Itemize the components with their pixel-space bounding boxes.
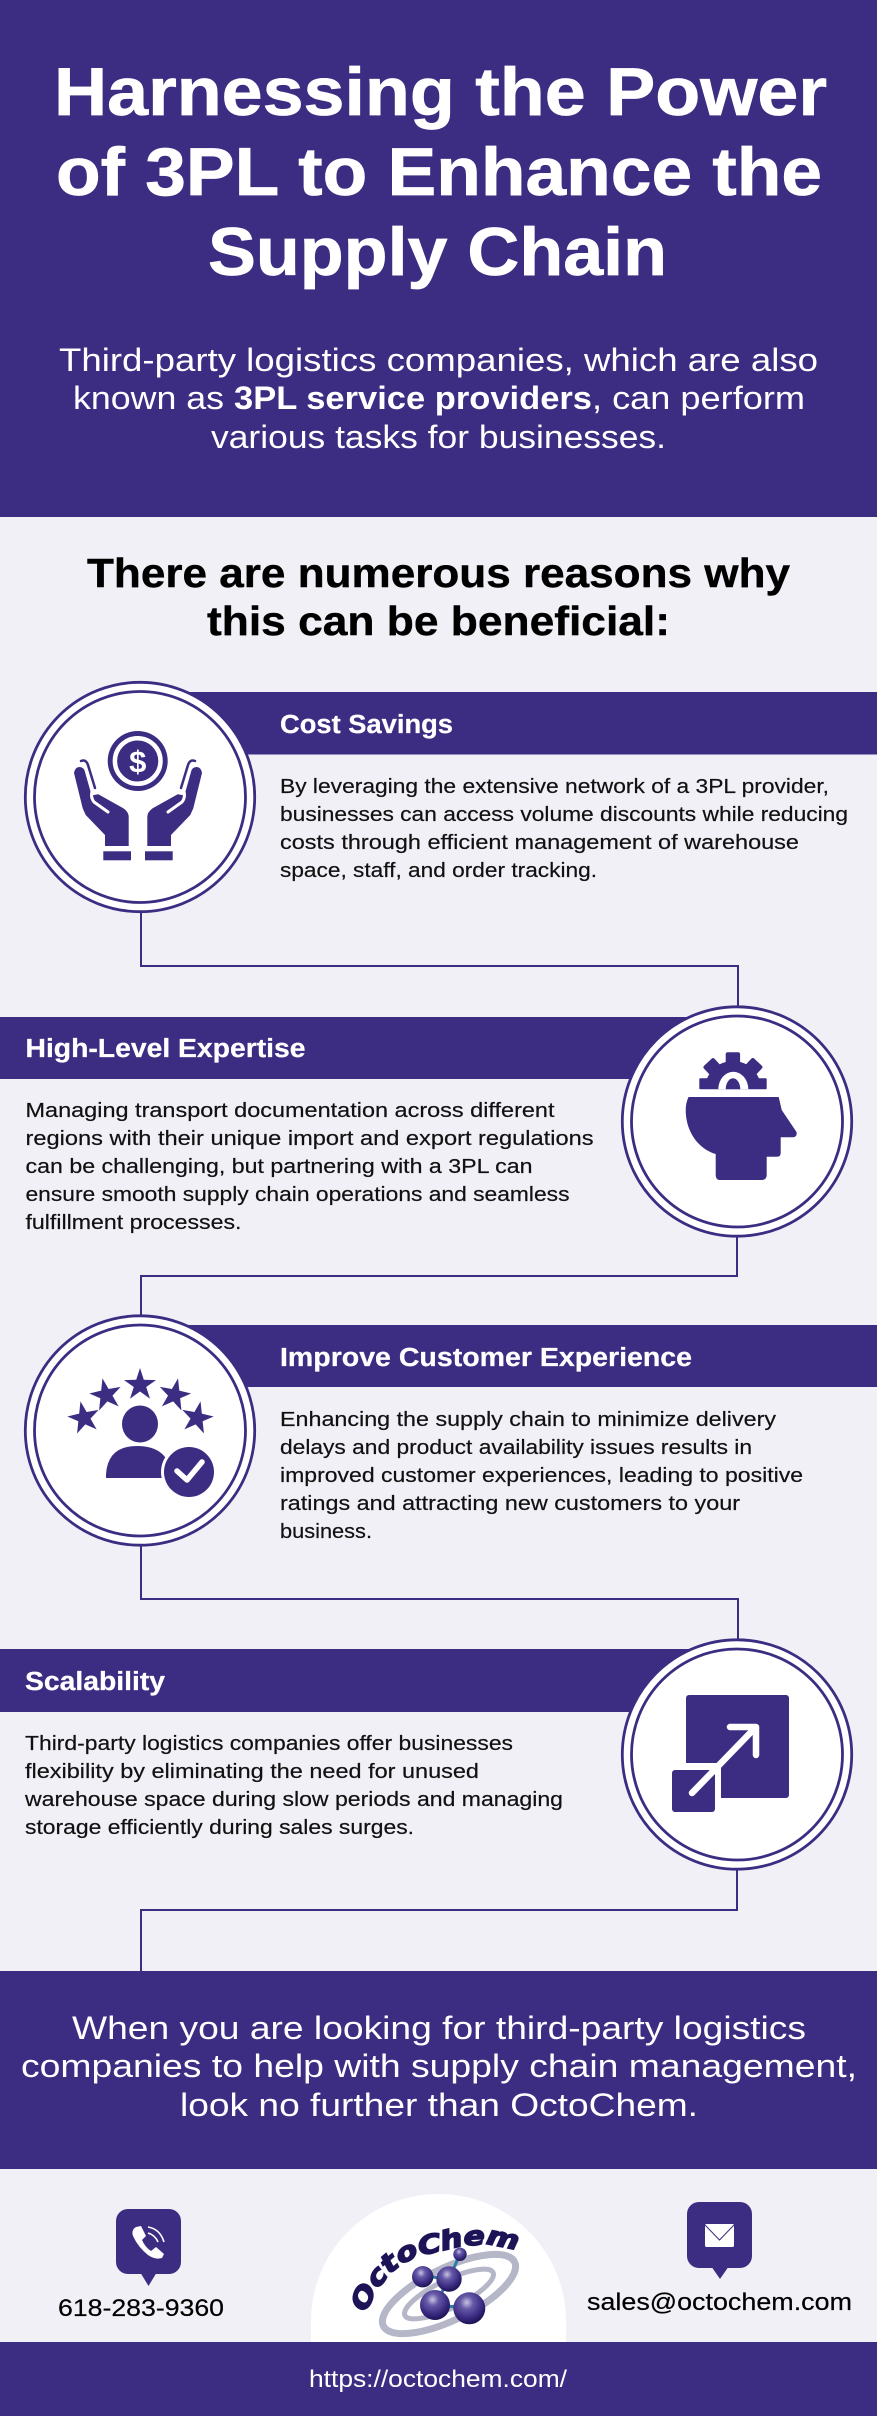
text: improve customer experience: delays and product availability issues results in xyxy=(280,1436,752,1459)
icon: hands holding coin xyxy=(25,682,255,912)
header panel xyxy=(0,0,877,517)
intro text xyxy=(59,342,818,455)
text: scalability: storage efficiently during sales surges. xyxy=(25,1816,414,1839)
section heading: There are numerous reasons why xyxy=(87,550,791,596)
intro text: , can perform xyxy=(592,380,805,416)
icon: customer with rating stars xyxy=(25,1316,255,1545)
call to action panel: When you are looking for third-party logistics xyxy=(72,2010,806,2046)
text: improve customer experience: business. xyxy=(280,1520,372,1543)
footer band with url: https://octochem.com/ xyxy=(309,2366,567,2393)
icon: phone pin xyxy=(116,2209,181,2286)
connector lines xyxy=(141,905,738,1971)
icon: head with gear xyxy=(622,1007,852,1236)
text: cost savings: By leveraging the extensive network of a 3PL provider, xyxy=(280,775,829,798)
text: high-level expertise: Managing transport documentation across different xyxy=(26,1099,555,1122)
text: scalability: Third-party logistics companies offer businesses xyxy=(25,1732,513,1755)
email contact xyxy=(587,2202,852,2316)
text: improve customer experience xyxy=(280,1408,803,1543)
call to action panel: companies to help with supply chain management, xyxy=(21,2048,857,2084)
text: improve customer experience: ratings and attracting new customers to your xyxy=(280,1492,740,1515)
text: scalability xyxy=(24,1732,563,1839)
text: high-level expertise xyxy=(26,1099,594,1234)
title xyxy=(54,54,827,290)
heading band: improve customer experience xyxy=(140,1325,877,1387)
logo spheres xyxy=(412,2248,485,2324)
icon: scale arrow xyxy=(622,1640,852,1869)
text: scalability: flexibility by eliminating the need for unused xyxy=(25,1760,479,1783)
logo swirl xyxy=(372,2239,526,2349)
panel: cost savings xyxy=(25,682,877,912)
icon: email pin xyxy=(687,2202,752,2279)
intro text: 3PL service providers xyxy=(234,380,592,416)
text: high-level expertise: ensure smooth supply chain operations and seamless xyxy=(26,1183,570,1206)
section heading xyxy=(87,550,791,644)
text: high-level expertise: fulfillment processes. xyxy=(26,1211,242,1234)
call to action panel: look no further than OctoChem. xyxy=(180,2087,698,2123)
call to action panel xyxy=(0,1971,877,2169)
heading band: high-level expertise xyxy=(0,1017,737,1079)
logo wordmark: OctoChem xyxy=(352,2228,519,2310)
icon: hands holding coin: $ xyxy=(129,744,146,779)
panel: high-level expertise xyxy=(0,1007,852,1236)
heading band: cost savings xyxy=(140,692,877,754)
heading band: high-level expertise: High-Level Expertise xyxy=(26,1035,306,1063)
heading band: scalability xyxy=(0,1649,737,1712)
intro text: Third-party logistics companies, which are also xyxy=(59,342,818,378)
title: Harnessing the Power xyxy=(54,54,827,130)
footer band with url xyxy=(0,2342,877,2416)
title: of 3PL to Enhance the xyxy=(56,134,822,210)
text: cost savings xyxy=(280,775,848,882)
phone contact xyxy=(58,2209,224,2322)
text: high-level expertise: regions with their unique import and export regulations xyxy=(26,1127,594,1150)
panel: scalability xyxy=(0,1640,852,1869)
email address: sales@octochem.com xyxy=(587,2289,852,2316)
title: Supply Chain xyxy=(208,214,667,290)
heading band: cost savings: Cost Savings xyxy=(280,711,453,739)
panel: improve customer experience xyxy=(25,1316,877,1545)
heading band: scalability: Scalability xyxy=(25,1668,166,1696)
heading band: improve customer experience: Improve Customer Experience xyxy=(280,1344,692,1372)
intro text: various tasks for businesses. xyxy=(211,419,666,455)
logo: OctoChem xyxy=(311,2194,566,2342)
text: improve customer experience: Enhancing the supply chain to minimize delivery xyxy=(280,1408,777,1431)
text: scalability: warehouse space during slow periods and managing xyxy=(24,1788,563,1811)
text: cost savings: costs through efficient management of warehouse xyxy=(280,831,799,854)
section heading: this can be beneficial: xyxy=(207,598,670,644)
text: improve customer experience: improved customer experiences, leading to positive xyxy=(280,1464,803,1487)
logo bonds xyxy=(424,2254,469,2308)
phone number: 618-283-9360 xyxy=(58,2295,224,2322)
text: cost savings: businesses can access volume discounts while reducing xyxy=(280,803,848,826)
text: cost savings: space, staff, and order tracking. xyxy=(280,859,597,882)
text: high-level expertise: can be challenging, but partnering with a 3PL can xyxy=(26,1155,532,1178)
intro text: known as xyxy=(73,380,224,416)
